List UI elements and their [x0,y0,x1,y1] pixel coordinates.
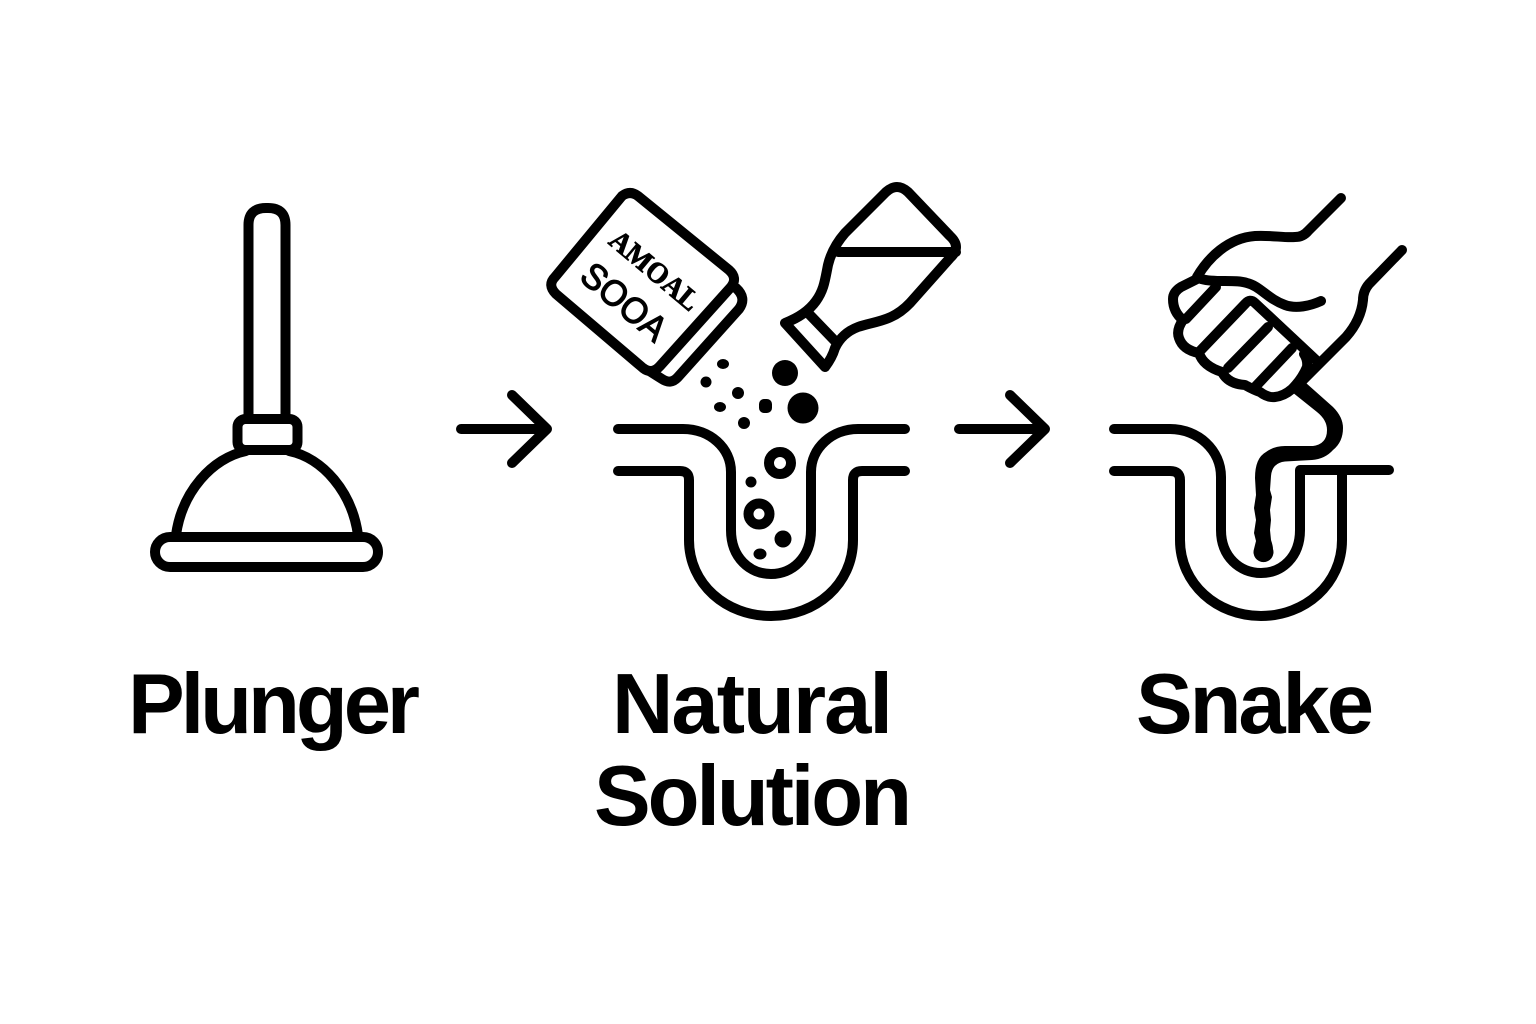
soda box label [573,224,706,349]
label: Plunger: Plunger [128,657,420,752]
icon: hand using drain snake [1114,198,1402,616]
plunger collar [238,419,298,450]
label: Natural Solution: Solution [594,749,912,844]
icon: plunger [155,208,378,567]
plunger handle [248,208,286,417]
label: Natural Solution: Natural [612,657,893,752]
drain pipe with snake [1114,429,1389,616]
label: Snake: Snake [1136,657,1374,752]
powder and bubbles falling [700,359,818,560]
label: Natural Solution [594,657,912,844]
bubble rings [748,452,791,524]
soda box [551,193,742,382]
soda box label: SOOA [573,254,676,349]
drain snake cable [1254,383,1343,562]
arrow: plunger to natural solution [461,395,547,463]
icon: baking soda box and vinegar bottle pouring into drain [551,187,956,616]
plunger base [155,537,378,567]
hand [1173,198,1402,397]
arrow: natural solution to snake [959,395,1045,463]
drain pipe [618,429,905,616]
plunger cup [176,451,358,535]
soda box label: AMOAL [603,224,706,318]
vinegar bottle [785,187,956,367]
